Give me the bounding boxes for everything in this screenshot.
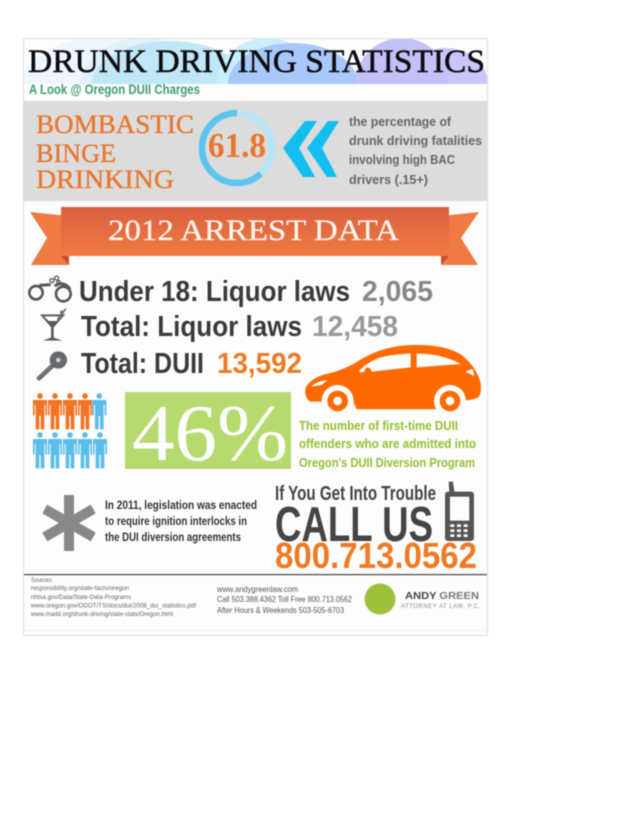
text: ignition interlocks: In 2011, legislation was enacted (105, 498, 257, 512)
heading: bombastic binge drinking: BINGE (36, 139, 116, 168)
text: ignition interlocks: to require ignition interlocks in (105, 514, 247, 528)
panel: binge drinking (24, 101, 487, 201)
icon: people pictogram (33, 393, 107, 468)
text: ignition interlocks: the DUI diversion agreements (105, 530, 241, 544)
stat: under 18 liquor laws: Under 18: Liquor laws (79, 276, 350, 308)
header cloud background (24, 38, 488, 84)
title: DRUNK DRIVING STATISTICS (28, 44, 485, 80)
logo: Andy Green attorney at law: ATTORNEY AT LAW, P.C. (401, 604, 480, 610)
icon: martini glass (40, 309, 66, 341)
stat: total DUII: 13,592 (217, 348, 302, 380)
icon: handcuffs (29, 276, 71, 301)
stat: under 18 liquor laws: 2,065 (362, 276, 433, 308)
text: high BAC description: drunk driving fatalities (349, 133, 482, 148)
stat: total DUII: Total: DUII (81, 348, 204, 380)
donut chart: 61.8: 61.8 (208, 126, 266, 165)
text: sources: Sources: (31, 578, 53, 584)
text: contact details: Call 503.388.4362 Toll Free 800.713.0562 (217, 594, 352, 604)
heading: bombastic binge drinking: BOMBASTIC (36, 110, 194, 139)
heading: bombastic binge drinking: DRINKING (36, 165, 174, 194)
ribbon banner: 2012 arrest data (30, 207, 479, 265)
text: sources: www.oregon.gov/ODOT/TS/docs/dui/2008_dui_statistics.pdf (30, 604, 196, 610)
text: contact details (216, 584, 352, 615)
icon: double chevron arrow (283, 121, 339, 177)
stat: total liquor laws: Total: Liquor laws (81, 311, 302, 343)
icon: orange car (303, 345, 483, 418)
logo: Andy Green attorney at law: ANDY GREEN (405, 591, 479, 602)
subtitle: A Look @ Oregon DUII Charges (29, 81, 200, 97)
infographic panel (24, 38, 488, 636)
icon: asterisk (42, 495, 96, 551)
call to action: If You Get Into Trouble (275, 483, 436, 505)
text: sources: nhtsa.gov/Data/State-Data-Programs (31, 595, 131, 601)
text: sources: responsibility.org/state-facts/oregon (31, 586, 129, 592)
text: diversion program: The number of first-time DUII (299, 419, 458, 433)
text: diversion program (299, 419, 476, 470)
text: ignition interlocks (105, 498, 257, 544)
text: sources (30, 578, 196, 618)
text: high BAC description: involving high BAC (349, 152, 456, 167)
icon: mobile phone (445, 482, 474, 541)
text: high BAC description: the percentage of (349, 114, 452, 129)
stat: total DUII (81, 348, 302, 380)
callout: 46%: 46% (132, 390, 288, 478)
donut chart: 61.8 (202, 113, 272, 183)
footer divider (24, 574, 487, 575)
call to action: CALL US (275, 498, 433, 552)
call to action: 800.713.0562 (275, 535, 477, 576)
text: sources: www.madd.org/drunk-driving/state-stats/Oregon.html (30, 612, 173, 618)
icon: key (39, 351, 67, 378)
text: high BAC description: drivers (.15+) (349, 172, 428, 187)
heading: bombastic binge drinking (36, 110, 194, 194)
call to action (275, 483, 477, 576)
stat: total liquor laws: 12,458 (312, 311, 398, 343)
text: diversion program: Oregon's DUII Diversion Program (299, 456, 475, 470)
logo: Andy Green attorney at law (364, 584, 480, 614)
text: contact details: www.andygreenlaw.com (216, 584, 298, 594)
ribbon banner: 2012 arrest data: 2012 ARREST DATA (108, 214, 399, 247)
text: contact details: After Hours & Weekends 503-505-6703 (217, 605, 344, 615)
footer bottom rule (24, 630, 487, 631)
text: high BAC description (349, 114, 482, 187)
text: diversion program: offenders who are admitted into (299, 437, 476, 451)
